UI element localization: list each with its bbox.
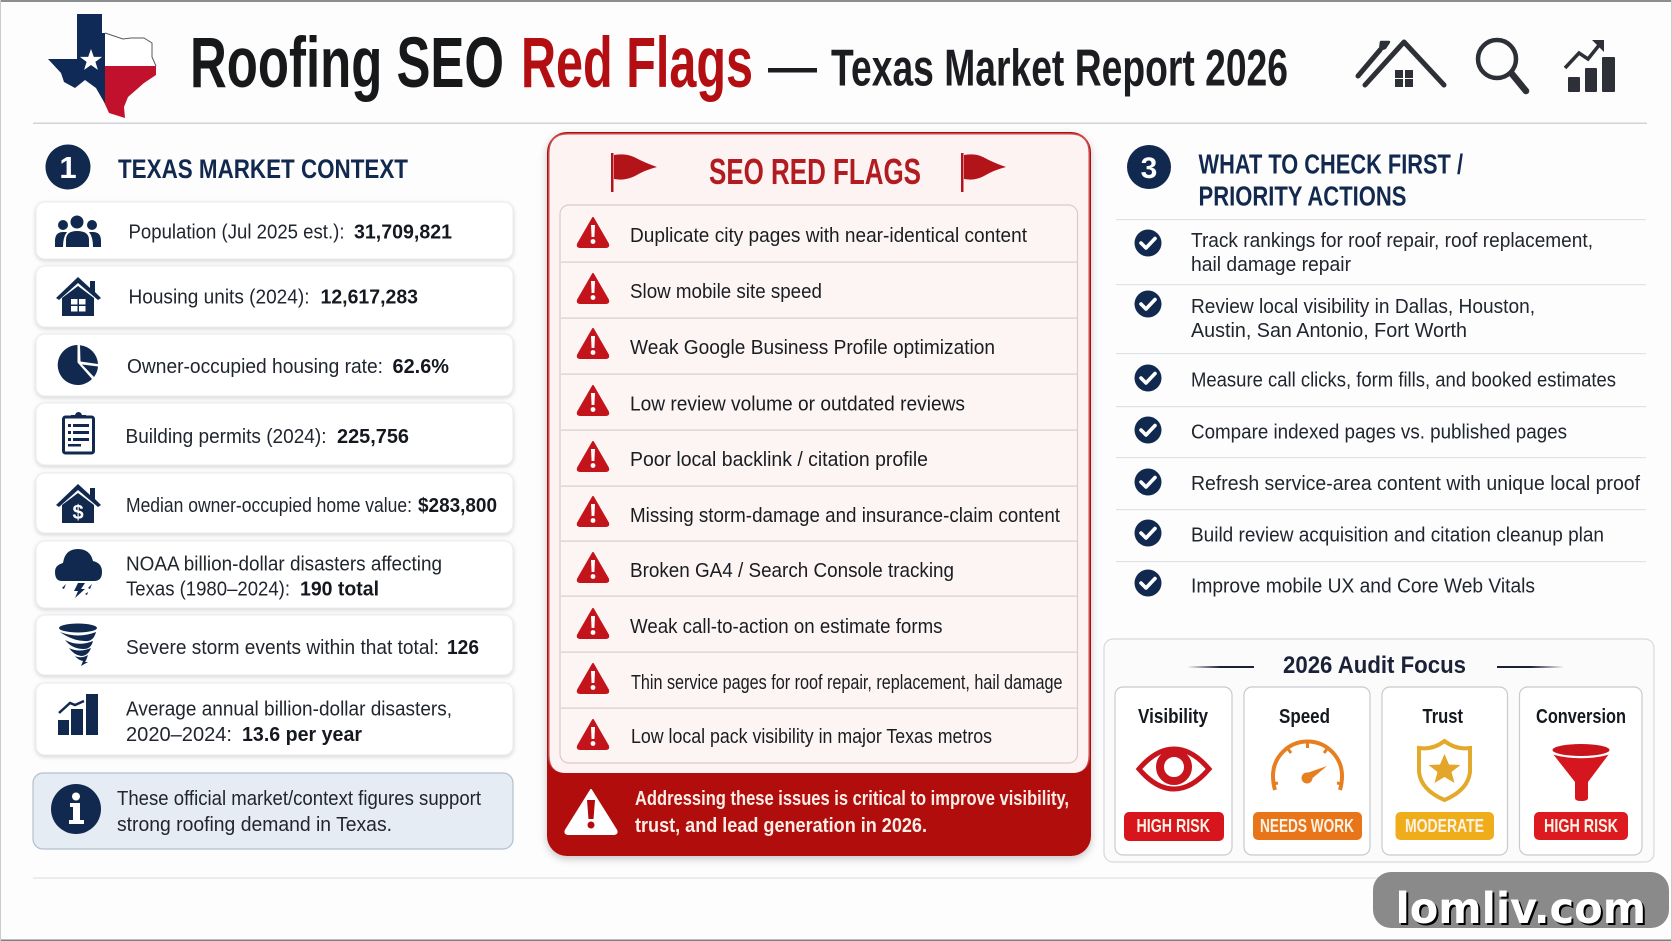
badge: moderate (1396, 812, 1494, 840)
flag item 6 (578, 497, 1060, 527)
stat card: median home value: $283,800 (418, 494, 497, 517)
action 4 (1134, 416, 1567, 444)
watermark: lomliv.com (1396, 884, 1646, 934)
action 1: hail damage repair (1191, 254, 1351, 276)
badge: needs work (1253, 812, 1362, 840)
audit card: visibility (1115, 687, 1232, 855)
heading: section 1: TEXAS MARKET CONTEXT (118, 154, 408, 184)
flag item 5: Poor local backlink / citation profile (630, 448, 928, 471)
red flag list (560, 205, 1078, 763)
callout: info note (33, 773, 513, 849)
stat card: NOAA disasters: 190 total (300, 578, 379, 600)
badge: high risk: HIGH RISK (1136, 816, 1210, 836)
audit card: speed (1244, 687, 1370, 855)
audit card: conversion (1520, 687, 1642, 855)
flag item 10: Low local pack visibility in major Texas metros (631, 725, 992, 748)
flag item 10 (578, 720, 992, 749)
heading: section 3: 3 (1141, 152, 1157, 185)
stat card: owner occupied rate: Owner-occupied housing rate: (127, 355, 383, 378)
panel: SEO red flags (547, 132, 1091, 856)
heading: seo red flags: SEO RED FLAGS (709, 151, 921, 192)
audit card: trust (1382, 687, 1508, 855)
icon: speedometer (1272, 742, 1343, 790)
action 2: Review local visibility in Dallas, Houston, (1191, 296, 1535, 318)
title: Red Flags (521, 24, 753, 103)
heading: audit focus: 2026 Audit Focus (1283, 652, 1466, 679)
heading: section 1: 1 (59, 150, 77, 185)
badge: high risk (1124, 812, 1224, 841)
stat card: owner occupied rate (36, 334, 513, 396)
stat card: severe storms: 126 (447, 636, 479, 659)
action 7: Improve mobile UX and Core Web Vitals (1191, 576, 1535, 598)
icon: house with dollar (56, 484, 101, 524)
callout: critical warning (565, 787, 1069, 837)
flag item 1: Duplicate city pages with near-identical content (630, 224, 1027, 247)
action 2: Austin, San Antonio, Fort Worth (1191, 320, 1467, 342)
action 5: Refresh service-area content with unique local proof (1191, 473, 1640, 495)
action 4: Compare indexed pages vs. published pages (1191, 422, 1567, 444)
title (190, 24, 1288, 103)
stat card: NOAA disasters (36, 541, 513, 608)
stat card: median home value (36, 473, 513, 533)
stat card: population: Population (Jul 2025 est.): (128, 220, 344, 244)
header (33, 10, 1647, 124)
stat card: housing units (36, 266, 513, 327)
panel: priority actions (1116, 145, 1646, 598)
icon: house with dollar: $ (72, 502, 84, 524)
watermark: lomliv.com (1398, 886, 1648, 936)
action 3 (1134, 364, 1616, 392)
stat card: average annual disasters: Average annual billion-dollar disasters, (126, 698, 452, 720)
icon: storm cloud (55, 549, 102, 598)
flag item 7 (578, 553, 954, 582)
flag item 7: Broken GA4 / Search Console tracking (630, 559, 954, 582)
audit card: speed: Speed (1279, 706, 1330, 728)
icon: warning triangle (565, 790, 617, 834)
action 1: Track rankings for roof repair, roof replacement, (1191, 230, 1593, 252)
icon: pie chart (58, 345, 98, 385)
flag item 9: Thin service pages for roof repair, replacement, hail damage (631, 671, 1062, 694)
stat card: average annual disasters (36, 683, 513, 755)
action 6: Build review acquisition and citation cleanup plan (1191, 524, 1604, 546)
stat card: housing units: 12,617,283 (320, 286, 418, 308)
stat card: median home value: Median owner-occupied home value: (126, 494, 412, 517)
callout: critical warning: trust, and lead generation in 2026. (635, 814, 927, 837)
icon: tornado (59, 624, 97, 666)
action 3: Measure call clicks, form fills, and booked estimates (1191, 370, 1616, 392)
flag item 4: Low review volume or outdated reviews (630, 392, 965, 416)
watermark (1373, 872, 1669, 936)
icon: shield star (1419, 741, 1470, 800)
icon: growth chart (1565, 40, 1615, 92)
badge: needs work: NEEDS WORK (1260, 816, 1354, 836)
stat card: housing units: Housing units (2024): (128, 286, 310, 308)
title: Roofing SEO (190, 24, 504, 103)
callout: critical warning: Addressing these issues is critical to improve visibility, (635, 787, 1069, 810)
icon: clipboard (64, 412, 94, 453)
flag item 2: Slow mobile site speed (630, 280, 822, 303)
icon: people (55, 216, 101, 247)
icon: funnel (1552, 744, 1610, 801)
stat card: population (36, 202, 513, 259)
badge: moderate: MODERATE (1405, 816, 1484, 836)
audit card: visibility: Visibility (1138, 706, 1209, 728)
flag item 3: Weak Google Business Profile optimization (630, 336, 995, 359)
stat card: building permits: Building permits (2024): (126, 425, 326, 448)
flag item 5 (578, 442, 928, 471)
action 6 (1134, 520, 1604, 546)
flag item 4 (578, 386, 965, 416)
heading: section 3: WHAT TO CHECK FIRST / (1198, 148, 1463, 180)
stat card: building permits (36, 403, 513, 465)
flag item 2 (578, 274, 822, 303)
icon: info (51, 784, 101, 834)
icon: left flag (611, 153, 657, 192)
icon: eye (1139, 749, 1209, 789)
badge: high risk (1534, 812, 1628, 840)
stat card: NOAA disasters: NOAA billion-dollar disasters affecting (126, 552, 442, 576)
heading: section 1 (46, 144, 408, 190)
panel: Texas market context (33, 144, 513, 849)
icon: Texas flag map (48, 14, 156, 118)
audit card: conversion: Conversion (1536, 706, 1626, 728)
action 2 (1134, 290, 1535, 342)
panel: 2026 audit focus (1104, 639, 1654, 862)
stat card: owner occupied rate: 62.6% (392, 355, 449, 378)
stat card: severe storms (36, 615, 513, 675)
stat card: NOAA disasters: Texas (1980–2024): (126, 578, 290, 600)
stat card: building permits: 225,756 (337, 425, 409, 448)
stat card: average annual disasters: 2020–2024: (126, 723, 232, 746)
stat card: population: 31,709,821 (354, 220, 452, 244)
icon: magnifier (1478, 40, 1526, 91)
icon: bar chart with trend (58, 694, 98, 735)
heading: section 3: PRIORITY ACTIONS (1198, 180, 1406, 212)
stat card: severe storms: Severe storm events within that total: (126, 636, 439, 659)
flag item 8 (578, 609, 942, 638)
icon: right flag (961, 153, 1006, 192)
heading: section 3 (1127, 145, 1463, 212)
flag item 9 (578, 664, 1062, 694)
title: Texas Market Report 2026 (831, 40, 1288, 98)
callout: info note: These official market/context figures support (117, 787, 481, 810)
stat card: average annual disasters: 13.6 per year (242, 723, 362, 746)
flag item 1 (578, 218, 1027, 247)
callout: info note: strong roofing demand in Texas. (117, 813, 392, 836)
flag item 3 (578, 329, 995, 359)
icon: house roof (1358, 42, 1444, 87)
flag item 6: Missing storm-damage and insurance-claim content (630, 504, 1060, 527)
action 7 (1134, 570, 1535, 598)
badge: high risk: HIGH RISK (1544, 816, 1618, 836)
action 1 (1134, 230, 1593, 276)
flag item 8: Weak call-to-action on estimate forms (630, 615, 942, 638)
audit card: trust: Trust (1422, 706, 1463, 728)
icon: house (56, 277, 101, 316)
